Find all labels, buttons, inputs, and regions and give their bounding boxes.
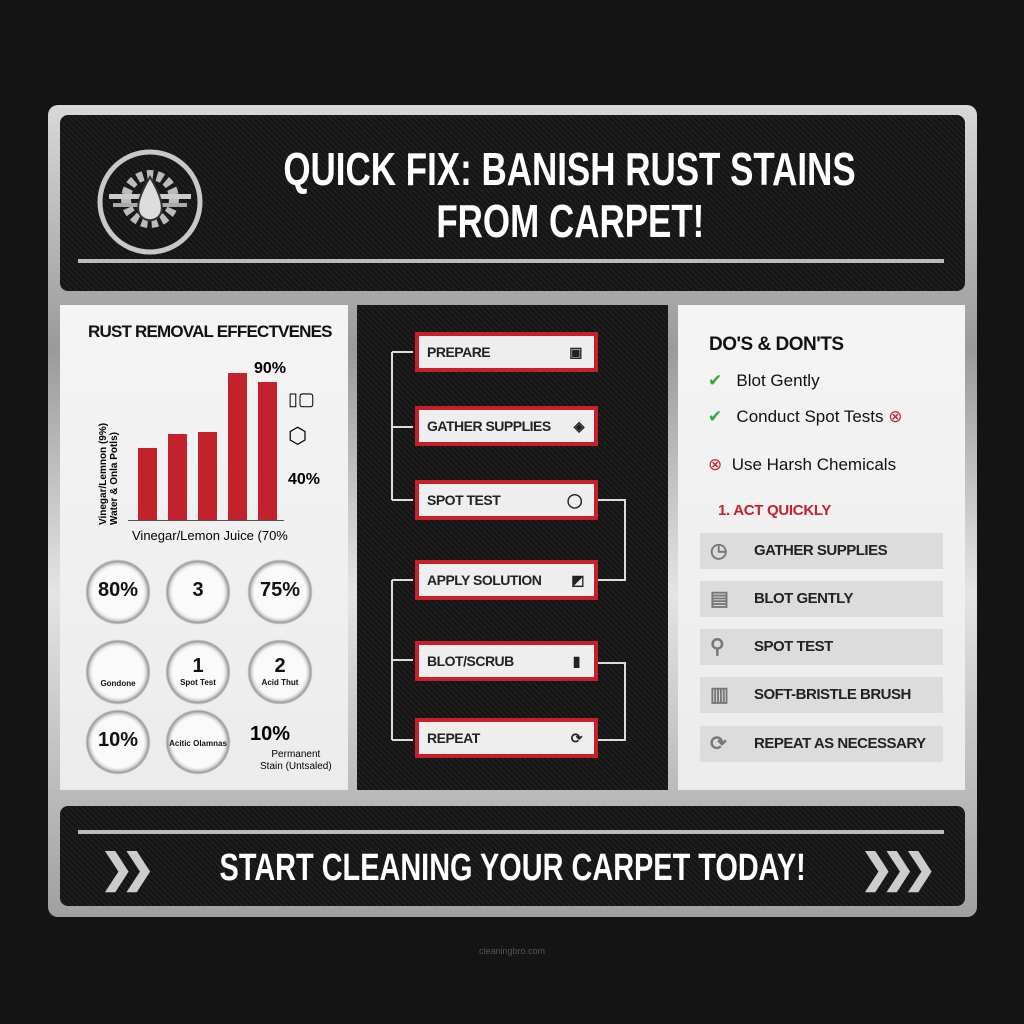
- gauges: [86, 560, 332, 774]
- panel: steps: [357, 305, 668, 790]
- outer frame: [48, 105, 977, 917]
- header panel: [60, 115, 965, 291]
- text: REPEAT AS NECESSARY: [754, 735, 926, 752]
- gauges: Acid Thut: [262, 678, 298, 687]
- footer banner: START CLEANING YOUR CARPET TODAY!: [219, 847, 806, 889]
- title: FROM CARPET!: [436, 195, 704, 247]
- step: prepare: [415, 332, 598, 372]
- gauges: Permanent: [271, 749, 320, 760]
- text: SPOT TEST: [754, 638, 833, 655]
- panel: dos and donts: ✔ Blot Gently: [708, 371, 820, 390]
- bar chart: 40%: [288, 471, 320, 488]
- text: ▤: [710, 588, 728, 610]
- gauges: 2: [274, 655, 286, 677]
- text: SOFT-BRISTLE BRUSH: [754, 686, 911, 703]
- text: ▥: [710, 684, 728, 706]
- gauges: Acitic Olamnas: [169, 739, 227, 748]
- footer banner: ❯❯❯: [860, 847, 925, 891]
- step: prepare: PREPARE: [427, 344, 490, 360]
- step: apply: ◩: [571, 572, 584, 588]
- step: repeat: ⟳: [571, 730, 582, 746]
- step: gather: [415, 406, 598, 446]
- gauges: 10%: [98, 729, 138, 751]
- panel: effectiveness: [60, 305, 348, 790]
- icon: gear drop: [98, 150, 202, 254]
- gauges: Stain (Untsaled): [260, 761, 332, 772]
- list: tips: [700, 533, 943, 569]
- step: repeat: REPEAT: [427, 730, 480, 746]
- gauges: Gondone: [100, 679, 136, 688]
- step: gather: GATHER SUPPLIES: [427, 418, 551, 434]
- bar chart: [98, 360, 320, 543]
- list: tips: GATHER SUPPLIES: [754, 542, 887, 559]
- step: blot: BLOT/SCRUB: [427, 653, 514, 669]
- text: BLOT GENTLY: [754, 590, 853, 607]
- text: ⚲: [710, 636, 724, 658]
- heading: RUST REMOVAL EFFECTVENES: [88, 322, 332, 341]
- panel: dos and donts: DO'S & DON'TS: [709, 334, 844, 355]
- title: [284, 143, 856, 247]
- gauges: 1: [192, 655, 204, 677]
- list: tips: ◷: [710, 540, 727, 562]
- footer banner: ❯❯: [100, 847, 143, 891]
- step: spot test: [415, 480, 598, 520]
- gauges: 10%: [250, 723, 290, 745]
- flow connectors: [391, 351, 626, 741]
- gauges: 3: [192, 579, 204, 601]
- step: gather: ◈: [574, 418, 584, 434]
- bar chart: ▯▢: [288, 389, 315, 409]
- step: blot: [415, 641, 598, 681]
- step: blot: ▮: [573, 653, 580, 669]
- step: apply: [415, 560, 598, 600]
- step: repeat: [415, 718, 598, 758]
- gauges: 75%: [260, 579, 300, 601]
- bar chart: Water & Onla Potls): [109, 432, 120, 525]
- panel: dos and donts: ⊗ Use Harsh Chemicals: [708, 455, 896, 474]
- gauges: 80%: [98, 579, 138, 601]
- footer credit: cleaningbro.com: [479, 946, 545, 956]
- title: QUICK FIX: BANISH RUST STAINS: [284, 143, 856, 195]
- bar chart: Vinegar/Lemon Juice (70%: [132, 528, 288, 543]
- gauges: Spot Test: [180, 678, 216, 687]
- bar chart: ⬡: [288, 423, 307, 448]
- bar chart: 90%: [254, 360, 286, 377]
- bar chart: Vinegar/Lemnon (9%): [98, 423, 109, 525]
- step: spot test: ◯: [567, 492, 582, 508]
- step: apply: APPLY SOLUTION: [427, 572, 541, 588]
- step: spot test: SPOT TEST: [427, 492, 500, 508]
- panel: dos and donts: ✔ Conduct Spot Tests ⊗: [708, 407, 902, 426]
- panel: dos and donts: 1. ACT QUICKLY: [718, 502, 831, 519]
- text: ⟳: [710, 733, 726, 755]
- footer banner: [60, 806, 965, 906]
- panel: dos and donts: [678, 305, 965, 790]
- step: prepare: ▣: [569, 344, 582, 360]
